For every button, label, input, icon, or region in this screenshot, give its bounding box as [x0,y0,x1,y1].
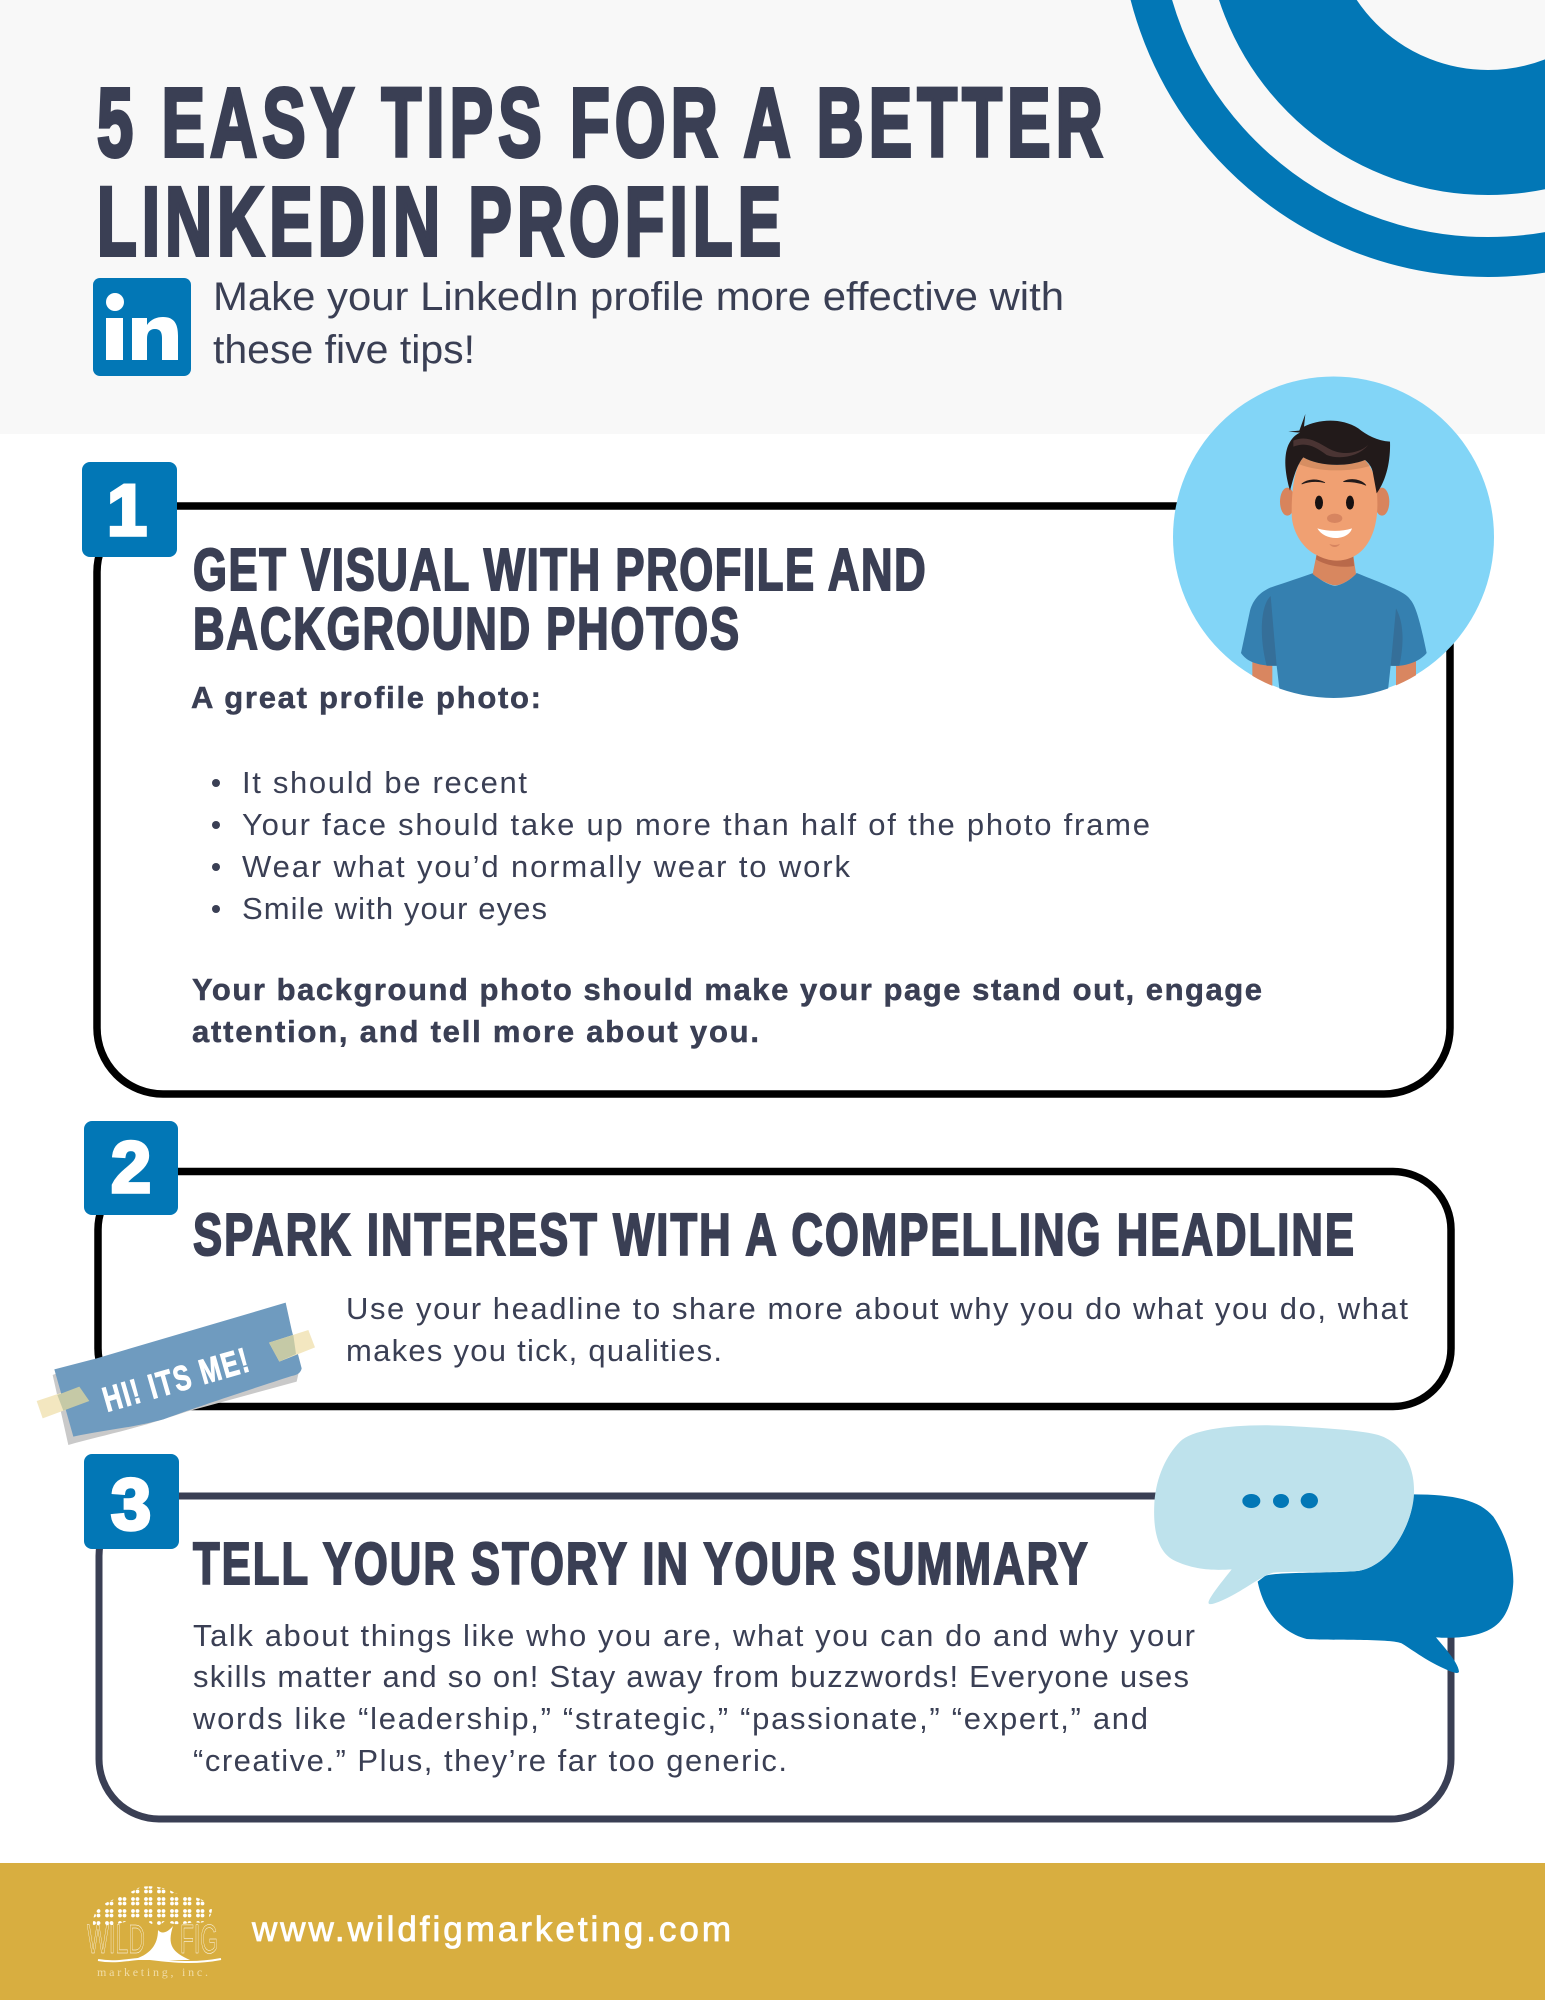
bullet list: Wear what you’d normally wear to work [242,849,850,884]
panel: tip 3 [84,1454,1451,1819]
bullet list: Smile with your eyes [242,891,547,926]
body text: tip 3: skills matter and so on! Stay away from buzzwords! Everyone uses [193,1659,1189,1694]
footer band [0,1863,1545,2000]
body text: tip 2: Use your headline to share more about why you do what you do, what [346,1291,1408,1326]
logo: Wild Fig Marketing: WILD [87,1916,145,1962]
website url: www.wildfigmarketing.com [251,1910,731,1949]
heading: tip 3: TELL YOUR STORY IN YOUR SUMMARY [193,1531,1088,1597]
bold note: background photo [192,972,1262,1049]
sticker: hi its me [37,1303,315,1445]
body text: tip 3: words like “leadership,” “strategic,” “passionate,” “expert,” and [192,1701,1148,1736]
bullet list: Your face should take up more than half of the photo frame [242,807,1150,842]
badge: number 2 [84,1121,178,1215]
logo: Wild Fig Marketing: marketing, inc. [97,1965,208,1979]
badge: number 3: 3 [111,1465,151,1545]
body text: tip 3: “creative.” Plus, they’re far too generic. [193,1743,787,1778]
sticker text: HI! ITS ME! [98,1341,253,1420]
body text: tip 2: makes you tick, qualities. [346,1333,722,1368]
subtitle [213,275,1064,372]
subtitle: these five tips! [213,328,475,372]
heading: tip 1: GET VISUAL WITH PROFILE AND [193,537,926,603]
bold note: background photo: Your background photo should make your page stand out, engage [192,972,1262,1007]
badge: number 1: 1 [107,471,147,551]
title: LINKEDIN PROFILE [97,168,781,276]
bullet list: It should be recent [242,765,527,800]
panel: tip 1 [82,462,1450,1094]
badge: number 3 [84,1454,179,1549]
icon: speech bubbles [1154,1425,1513,1673]
badge: number 1 [82,462,177,557]
bold note: background photo: attention, and tell more about you. [192,1014,759,1049]
title [97,69,1103,276]
heading: tip 1 [193,537,926,662]
decorative blue rings [1139,0,1545,257]
icon: LinkedIn logo [93,278,191,376]
heading: tip 1: BACKGROUND PHOTOS [193,596,739,662]
body text: tip 2 [346,1291,1408,1368]
header band [93,0,1545,376]
logo: Wild Fig Marketing [87,1886,221,1979]
bullet list [212,765,1150,926]
heading: tip 2: SPARK INTEREST WITH A COMPELLING HEADLINE [193,1202,1354,1268]
panel: tip 2 [84,1121,1451,1406]
subheading: profile photo: A great profile photo: [191,680,541,715]
body text: tip 3: Talk about things like who you are, what you can do and why your [193,1618,1195,1653]
subtitle: Make your LinkedIn profile more effective with [213,275,1064,319]
illustration: smiling man in circle [1173,376,1494,703]
title: 5 EASY TIPS FOR A BETTER [97,69,1103,177]
badge: number 2: 2 [111,1128,151,1208]
logo: Wild Fig Marketing: FIG [180,1916,218,1962]
body text: tip 3 [192,1618,1195,1778]
